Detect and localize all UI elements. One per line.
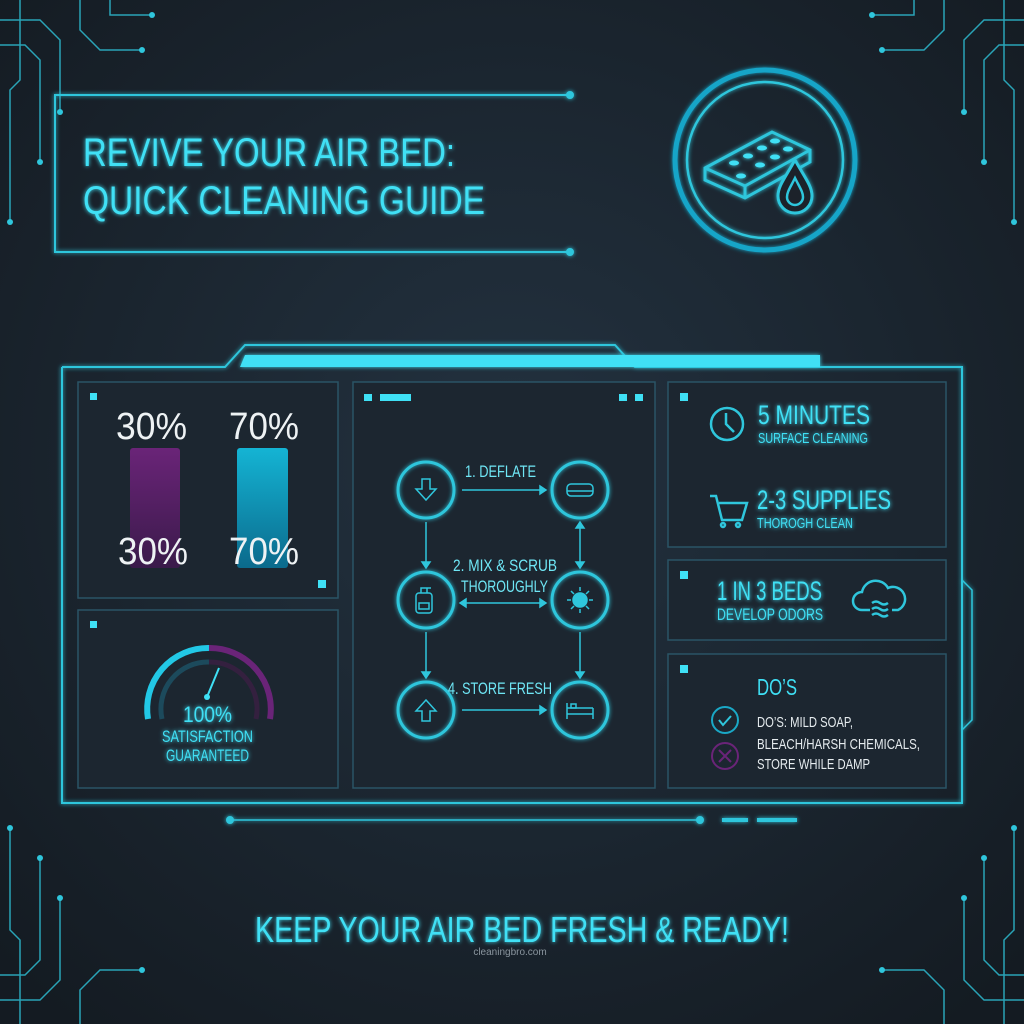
panel: bar chart: 70%	[229, 531, 299, 573]
panel: bar chart: 70%	[229, 406, 299, 448]
panel: bar chart: 30%	[116, 406, 187, 448]
panel: odor stat	[668, 560, 946, 640]
panel: do's and don'ts	[668, 654, 946, 788]
panel: time & supplies stats: 2-3 SUPPLIES	[757, 485, 891, 515]
panel: time & supplies stats: SURFACE CLEANING	[758, 430, 868, 447]
panel: odor stat: 1 IN 3 BEDS	[717, 576, 822, 606]
footer title: KEEP YOUR AIR BED FRESH & READY!	[255, 909, 789, 950]
panel: time & supplies stats: THOROGH CLEAN	[757, 515, 853, 532]
panel: satisfaction gauge: SATISFACTION	[162, 727, 253, 746]
panel: process flow: 4. STORE FRESH	[448, 679, 552, 698]
panel: process flow: THOROUGHLY	[461, 577, 548, 596]
panel: process flow	[353, 382, 655, 788]
panel: odor stat: DEVELOP ODORS	[717, 605, 823, 624]
panel: process flow: 2. MIX & SCRUB	[453, 556, 557, 575]
title	[83, 131, 485, 223]
panel: bar chart: 30%	[118, 531, 188, 573]
panel: satisfaction gauge: 100%	[183, 702, 232, 727]
footer credit: cleaningbro.com	[473, 947, 547, 958]
panel: satisfaction gauge	[78, 610, 338, 788]
panel: process flow: 1. DEFLATE	[465, 462, 536, 481]
panel: time & supplies stats	[668, 382, 946, 547]
icon: sponge with water drop in circle	[675, 70, 855, 250]
panel: do's and don'ts: STORE WHILE DAMP	[757, 756, 870, 773]
title: QUICK CLEANING GUIDE	[83, 179, 485, 223]
title: REVIVE YOUR AIR BED:	[83, 131, 455, 175]
main frame	[62, 345, 972, 823]
panel: do's and don'ts: DO’S	[757, 674, 797, 700]
panel: time & supplies stats: 5 MINUTES	[758, 400, 870, 430]
panel: satisfaction gauge: GUARANTEED	[166, 746, 249, 765]
panel: bar chart	[78, 382, 338, 598]
title frame	[55, 92, 573, 255]
panel: do's and don'ts: BLEACH/HARSH CHEMICALS,	[757, 736, 920, 753]
panel: do's and don'ts: DO’S: MILD SOAP,	[757, 714, 853, 731]
